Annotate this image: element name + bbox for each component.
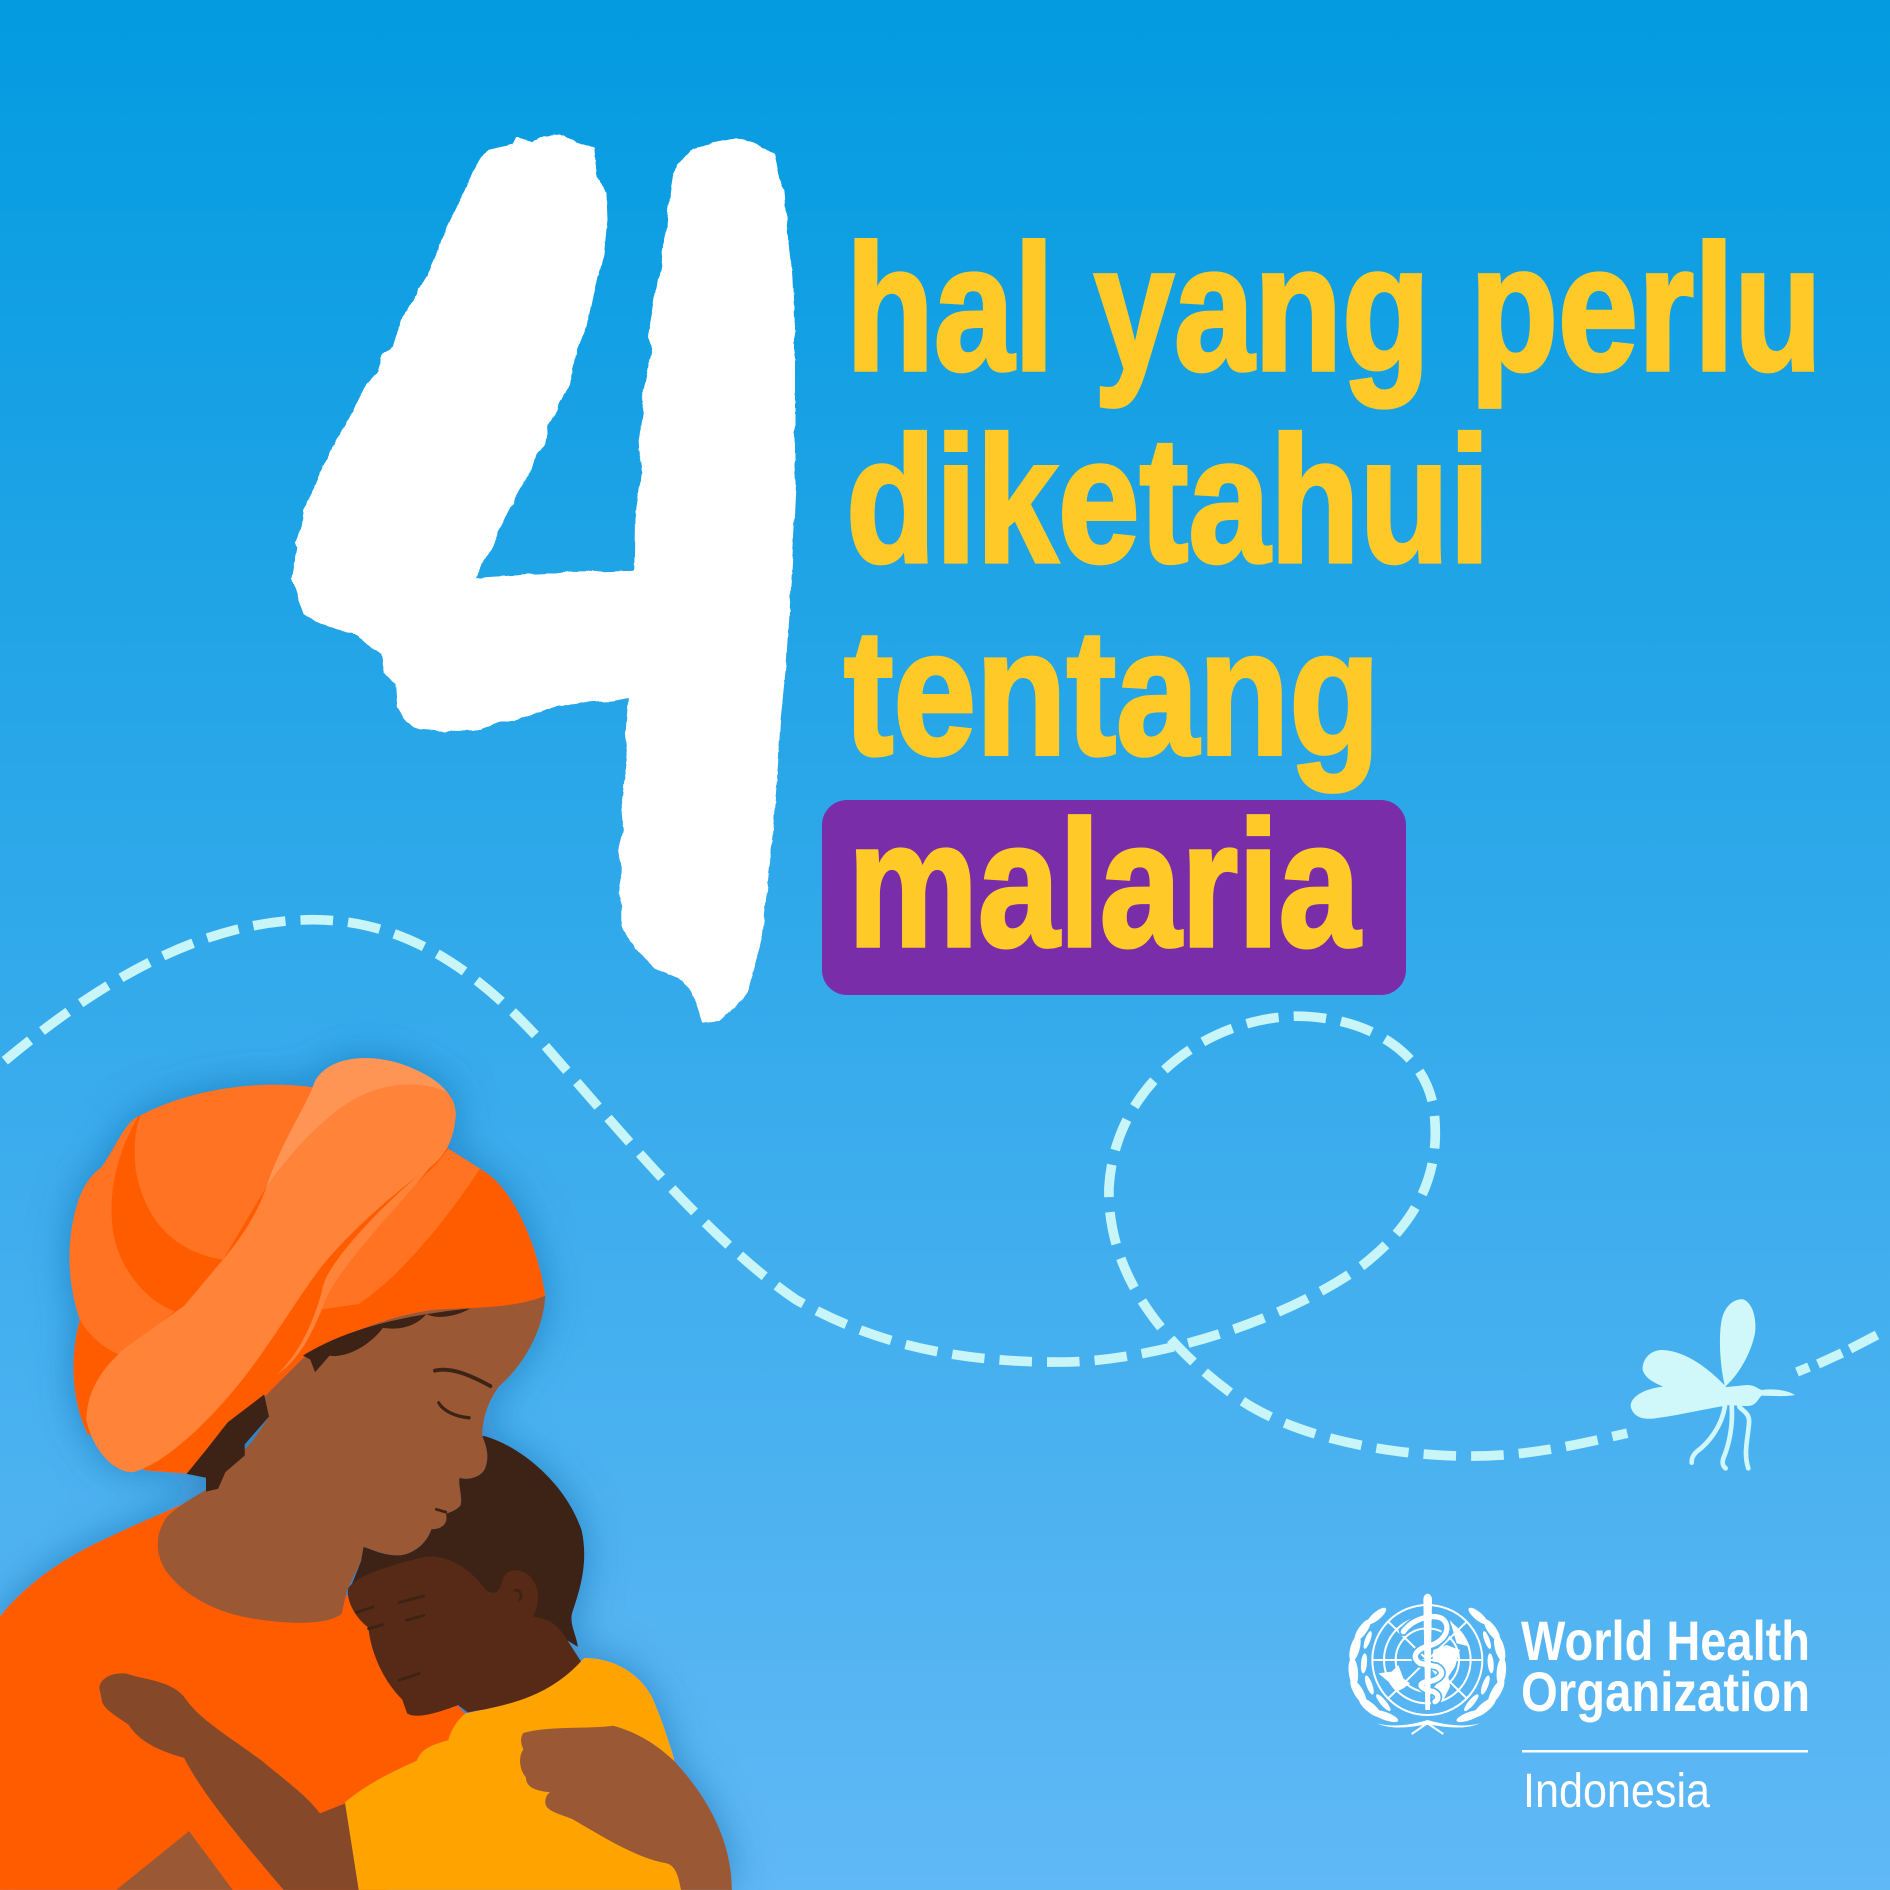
turban highlight: [267, 1058, 446, 1186]
staff and serpent: [1403, 1617, 1447, 1702]
WHO emblem: [1347, 1594, 1508, 1734]
right laurel: [1455, 1605, 1508, 1725]
baby's arm: [99, 1673, 359, 1890]
heading line 3: tentang: [844, 592, 1380, 792]
mother's face and neck: [158, 1296, 545, 1623]
organisation name: [1521, 1609, 1810, 1723]
turban right fold: [320, 1149, 480, 1310]
WHO logo: [1347, 1594, 1810, 1818]
mother's front hair: [303, 1308, 470, 1372]
ribbon: [1377, 1720, 1480, 1728]
illustration: mother and baby: [0, 1058, 732, 1890]
baby's hair: [349, 1436, 584, 1647]
organisation name: Organization: [1521, 1660, 1810, 1723]
mother's lower arm: [116, 1831, 233, 1890]
turban stripe: [276, 1165, 431, 1375]
turban base: [70, 1085, 545, 1474]
baby's facial lines: [356, 1590, 521, 1680]
big hand-painted number 4: [291, 135, 796, 1023]
dashed mosquito flight path: [5, 920, 1877, 1456]
turban left fold: [70, 1117, 174, 1356]
mother's eyebrow and eye: [435, 1370, 491, 1512]
baby's face: [348, 1556, 584, 1716]
globe grid: [1372, 1605, 1482, 1715]
malaria highlight box: malaria: [848, 784, 1361, 984]
logo divider: [1522, 1750, 1808, 1752]
turban band: [86, 1058, 456, 1472]
icon: mosquito: [1631, 1299, 1795, 1468]
left laurel: [1347, 1605, 1400, 1725]
mother's back hair: [187, 1394, 269, 1492]
mother's shirt: [0, 1492, 465, 1890]
title heading: [844, 208, 1822, 792]
mother's hand on baby: [520, 1726, 732, 1890]
heading line 2: diketahui: [846, 400, 1490, 600]
baby's shirt: [345, 1658, 688, 1890]
continents: [1378, 1665, 1410, 1692]
organisation name: World Health: [1521, 1609, 1810, 1672]
turban upper fold: [135, 1085, 315, 1260]
country label: Indonesia: [1523, 1765, 1710, 1818]
